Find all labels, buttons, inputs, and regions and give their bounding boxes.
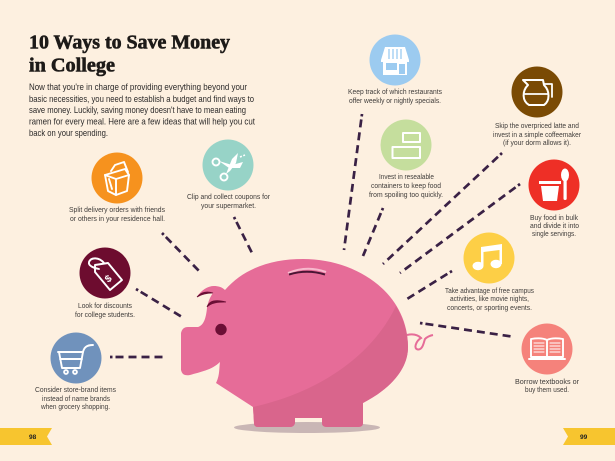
icon: storefront xyxy=(381,47,409,75)
caption: Consider store-brand items xyxy=(35,387,116,394)
caption: your supermarket. xyxy=(201,203,256,210)
tip: delivery orders xyxy=(69,152,165,223)
caption: Split delivery orders with friends xyxy=(69,207,165,214)
caption xyxy=(445,288,534,312)
caption: Clip and collect coupons for xyxy=(187,194,271,201)
icon: music note xyxy=(472,244,502,270)
intro text xyxy=(29,82,255,138)
caption: invest in a simple coffeemaker xyxy=(493,132,582,139)
tip: student discounts xyxy=(75,248,135,319)
tip: campus activities xyxy=(445,232,534,312)
caption xyxy=(530,215,579,238)
caption: offer weekly or nightly specials. xyxy=(349,98,441,105)
pig eye xyxy=(215,324,227,335)
caption: Take advantage of free campus xyxy=(445,288,534,295)
tip: buy in bulk xyxy=(528,160,580,238)
pig belly shade xyxy=(253,306,408,427)
icon: scissors xyxy=(212,153,245,180)
caption: Borrow textbooks or xyxy=(515,379,580,386)
intro text: save money. Luckily, saving money doesn't have to mean eating xyxy=(29,105,246,115)
caption: Look for discounts xyxy=(78,303,132,310)
tip: restaurant specials xyxy=(348,34,442,105)
caption xyxy=(187,194,271,210)
caption: instead of name brands xyxy=(42,396,110,403)
tip: coupons xyxy=(187,140,271,210)
dashed connector lines xyxy=(110,114,520,357)
pig ear marks xyxy=(197,292,226,307)
caption: for college students. xyxy=(75,312,135,319)
icon: takeout box xyxy=(105,162,129,195)
caption: single servings. xyxy=(532,231,576,238)
intro text: basic necessities, you need to establish a budget and find ways to xyxy=(29,94,254,104)
caption xyxy=(35,387,116,411)
pig body xyxy=(181,259,408,427)
title xyxy=(29,32,230,76)
icon: price tag xyxy=(89,258,122,290)
page number 98 xyxy=(0,428,52,445)
intro text: Now that you're in charge of providing everything beyond your xyxy=(29,82,247,92)
caption xyxy=(75,303,135,319)
caption xyxy=(493,123,582,147)
caption: containers to keep food xyxy=(371,183,441,190)
coin slot xyxy=(288,269,326,273)
caption: Invest in resealable xyxy=(379,174,434,181)
caption: concerts, or sporting events. xyxy=(447,305,532,312)
caption: Buy food in bulk xyxy=(530,215,578,222)
tip: coffeemaker xyxy=(493,66,582,147)
shadow xyxy=(234,422,380,433)
caption: buy them used. xyxy=(525,387,569,394)
caption xyxy=(69,207,165,223)
caption: from spoiling too quickly. xyxy=(369,192,443,199)
page number 98: 98 xyxy=(29,434,37,441)
page number 99: 99 xyxy=(580,434,588,441)
caption: (if your dorm allows it). xyxy=(503,140,571,147)
dollar sign: $ xyxy=(103,273,115,285)
caption xyxy=(369,174,443,199)
icon: shopping cart xyxy=(58,345,93,374)
caption: when grocery shopping. xyxy=(40,404,110,411)
intro text: ramen for every meal. Here are a few ideas that will help you cut xyxy=(29,116,255,126)
caption: activities, like movie nights, xyxy=(450,296,529,303)
caption: or others in your residence hall. xyxy=(70,216,165,223)
page number 99 xyxy=(563,428,615,445)
caption xyxy=(515,379,580,394)
caption xyxy=(348,89,442,105)
tip: store brands xyxy=(35,332,116,411)
icon: containers xyxy=(392,133,420,158)
caption: and divide it into xyxy=(530,223,579,230)
title: 10 Ways to Save Money xyxy=(29,32,230,54)
caption: Keep track of which restaurants xyxy=(348,89,442,96)
intro text: back on your spending. xyxy=(29,128,108,138)
icon: cup and spoon xyxy=(539,168,569,201)
piggy bank xyxy=(181,259,433,433)
icon: open book xyxy=(529,338,565,359)
icon: coffee pot xyxy=(523,80,552,105)
title: in College xyxy=(29,56,115,76)
pig tail xyxy=(407,334,433,350)
tip: textbooks xyxy=(515,324,580,394)
caption: Skip the overpriced latte and xyxy=(495,123,579,130)
tip: reusable containers xyxy=(369,120,443,199)
